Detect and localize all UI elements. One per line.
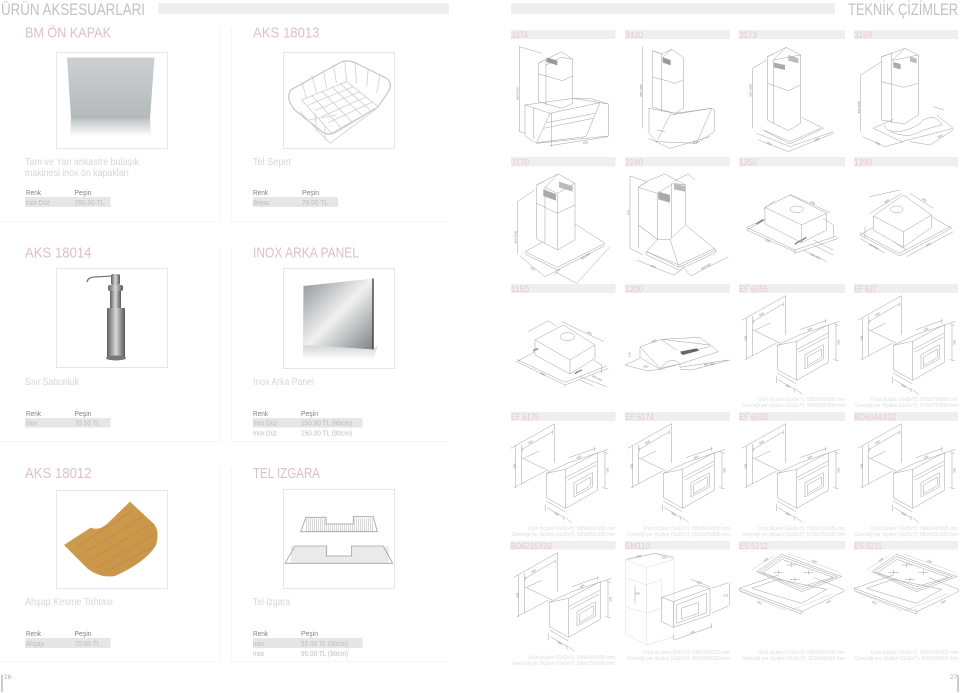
- drawing: hood 2240: 600: [650, 264, 657, 270]
- heading: BM ön kapak: BM ÖN KAPAK: [25, 24, 111, 42]
- panel: AKS 18013: [253, 24, 394, 207]
- price table: tel ızgara: Peşin: [301, 629, 318, 638]
- page number 26: 26: [4, 674, 12, 681]
- model label bars: ES 5212: [739, 541, 768, 552]
- model label bars: EM110: [625, 541, 650, 552]
- model label bars: EF 6175: [511, 412, 539, 423]
- panel: AKS 18012: [0, 465, 448, 662]
- drawing: hood 3159: 500: [875, 141, 881, 146]
- price table: tel ızgara: Inox: [253, 639, 264, 648]
- drawing: hood 3374: [515, 47, 608, 147]
- drawing: hood 3170: 850-1050: [514, 230, 518, 243]
- captions: product and niche dimensions: Ürün ölçüleri (GxDxY): 594x540x595 mm: [528, 654, 615, 661]
- price table: BM ön kapak: 260.00 TL: [74, 198, 104, 207]
- model label bars: 1390: [854, 158, 872, 168]
- drawing: oven EF 627: [858, 296, 956, 395]
- drawing: hood 1200: [625, 337, 730, 371]
- drawing: hood 1390: 600: [925, 242, 932, 248]
- price table: BM ön kapak: Peşin: [74, 188, 92, 197]
- photo: wire basket: [284, 52, 394, 148]
- model label bars: 3159: [854, 30, 872, 41]
- drawing: hood 3173: [749, 47, 833, 152]
- drawing: hood 1150: [517, 321, 608, 387]
- captions: product and niche dimensions: Ürün ölçüleri (GxDxY): 535x350x375 mm: [643, 649, 730, 656]
- photo: soap dispenser: [56, 268, 168, 368]
- description: sıvı sabunluk: Sıvı Sabunluk: [25, 377, 80, 388]
- drawing: hood 3420: 600: [693, 140, 699, 145]
- drawing: hood 1390: 300-450: [868, 242, 880, 251]
- drawing: hood 1200: 165: [628, 352, 632, 357]
- drawing: hob ES 5211: [854, 554, 958, 614]
- price table: AKS 18014: 70.00 TL: [74, 418, 100, 428]
- drawing: hood 1350: [747, 194, 838, 262]
- drawing: hood 1350: 600: [765, 238, 771, 244]
- drawing: oven EF 6175: [511, 424, 609, 523]
- drawing: microwave EM110: 560: [636, 554, 642, 559]
- photo: inox front panel: [56, 52, 168, 148]
- panel: tel ızgara: [253, 465, 394, 658]
- price table: AKS 18014: [25, 409, 110, 428]
- drawing: hood 3173: 850-1050: [749, 84, 753, 97]
- heading: AKS 18012: AKS 18012: [25, 465, 92, 482]
- drawing: hood 1150: 280: [586, 330, 593, 336]
- page number 27: 27: [950, 674, 958, 681]
- drawing: microwave EM110: [626, 553, 729, 645]
- model label bars: 3374: [511, 30, 528, 41]
- description: ahşap kesme tahtası: Ahşap Kesme Tahtası: [25, 597, 113, 608]
- drawing: hood 3420: 850-1050: [639, 84, 643, 97]
- drawing: hob ES 5212: [739, 554, 843, 614]
- price table: inox arka panel: 150.00 TL (90cm): [301, 428, 352, 438]
- price table: tel ızgara: Renk: [253, 629, 268, 638]
- drawing: hood 1200: 500: [643, 364, 649, 368]
- description: tel ızgara: Tel Izgara: [253, 597, 290, 608]
- model label bars: 1200: [625, 284, 643, 295]
- drawing: hood 3173: 600: [814, 137, 820, 143]
- price table: AKS 18014: Inox: [26, 418, 37, 428]
- price table: inox arka panel: Peşin: [301, 409, 318, 418]
- drawing: hood 2240: 600-900: [700, 262, 712, 271]
- price table: AKS 18013: Peşin: [302, 188, 319, 197]
- price table: inox arka panel: Inox Düz: [253, 428, 277, 438]
- drawing: hood 1390: 280: [921, 197, 928, 203]
- drawing: hood 1150: 300-450: [591, 374, 603, 382]
- title: ürün aksesuarları: ÜRÜN AKSESUARLARI: [1, 1, 145, 19]
- price table: BM ön kapak: Inox Düz: [26, 198, 50, 207]
- photo: inox back panel: [284, 268, 394, 368]
- captions: product and niche dimensions: Gireceği yer ölçüleri (GxDxY): 560x550x585 mm: [512, 532, 615, 538]
- price table: AKS 18012: 70.00 TL: [74, 639, 100, 648]
- captions: product and niche dimensions: Gireceği yer ölçüleri (GxDxY): 560x550x590 mm: [742, 403, 845, 409]
- model label bars: 2240: [625, 158, 643, 168]
- drawing: hood 1350: 598: [810, 200, 816, 206]
- heading: inox arka panel: INOX ARKA PANEL: [253, 244, 359, 262]
- drawing: oven BO6216X02: [514, 553, 612, 652]
- drawing: microwave EM110: 350: [697, 580, 702, 584]
- captions: product and niche dimensions: Gireceği yer ölçüleri (GxDxY): 570x570x590 mm: [742, 532, 845, 538]
- model label bars: EF 627: [854, 284, 877, 295]
- drawing: oven EF 6055: [742, 296, 840, 395]
- price table: inox arka panel: [253, 409, 362, 438]
- page number 27: [950, 674, 958, 692]
- model label bars: BO6216X02: [510, 541, 552, 552]
- drawing: microwave EM110: 595: [690, 629, 696, 635]
- photo: wire racks: [284, 490, 394, 588]
- page number 26: [2, 674, 12, 692]
- description: tel sepet: Tel Sepet: [253, 157, 291, 168]
- panel: AKS 18014: [0, 244, 448, 442]
- panel: BM ön kapak: [0, 24, 448, 222]
- captions: product and niche dimensions: Gireceği yer ölçüleri (GxDxY): 580x550x580 mm: [512, 661, 615, 667]
- drawing: hood 3374: 600: [583, 140, 589, 145]
- drawing: hood 2240: [626, 174, 728, 276]
- price table: tel ızgara: 95.00 TL (90cm): [301, 649, 348, 658]
- model label bars: 3173: [739, 30, 757, 41]
- drawing: hood 3159: 850-1050: [857, 100, 861, 113]
- price table: AKS 18012: Ahşap: [26, 639, 44, 648]
- description: BM ön kapak: Tam ve Yan ankastre bulaşık: [25, 157, 140, 168]
- price table: inox arka panel: Inox Düz: [253, 418, 277, 428]
- price table: BM ön kapak: Renk: [26, 188, 41, 197]
- captions: product and niche dimensions: Ürün ölçüleri (GxDxY): 595x560x595 mm: [528, 525, 615, 532]
- title: teknik çizimler: [511, 0, 958, 19]
- model label bars: 1150: [511, 284, 529, 295]
- price table: tel ızgara: [253, 629, 362, 658]
- captions: product and niche dimensions: Ürün ölçüleri (GxDxY): 590x570x595 mm: [758, 525, 845, 532]
- model label bars: BO6044X02: [854, 412, 896, 423]
- description: BM ön kapak: makinesi inox ön kapakları: [25, 168, 129, 179]
- model label bars: 3170: [511, 158, 529, 168]
- photo: wooden cutting board: [56, 490, 168, 588]
- price table: tel ızgara: 55.00 TL (60cm): [301, 639, 348, 648]
- drawing: hood 1390: 598: [883, 198, 890, 204]
- price table: AKS 18012: Peşin: [74, 629, 92, 638]
- drawing: hood 3173: 500: [766, 141, 773, 146]
- captions: product and niche dimensions: Gireceği yer ölçüleri (GxDxY): 553x490x50 mm: [742, 656, 845, 662]
- drawing: microwave EM110: 375: [723, 594, 729, 598]
- drawing: oven BO6044X02: [858, 424, 956, 523]
- model label bars: [510, 30, 958, 552]
- price table: AKS 18012: [25, 629, 110, 648]
- price table: AKS 18013: Beyaz: [253, 198, 270, 207]
- drawing: hood 3170: 600-900: [580, 251, 592, 261]
- drawing: hood 1350: 300-450: [810, 252, 821, 261]
- drawing: hood 1390: [860, 190, 953, 257]
- drawing: hood 3159: 600: [937, 133, 944, 139]
- model label bars: EF 6033: [739, 412, 768, 423]
- price table: AKS 18013: Renk: [253, 188, 268, 197]
- drawing: hood 3170: [514, 174, 610, 283]
- model label bars: 3420: [625, 30, 643, 41]
- drawing: hood 3420: [639, 47, 714, 148]
- captions: product and niche dimensions: Gireceği yer ölçüleri (GxDxY): 560x560x585 mm: [627, 532, 730, 538]
- price table: tel ızgara: Inox: [253, 649, 264, 658]
- price table: AKS 18013: 70.00 TL: [302, 198, 328, 207]
- price table: BM ön kapak: [25, 188, 110, 207]
- price table: AKS 18014: Renk: [26, 409, 41, 418]
- price table: inox arka panel: Renk: [253, 409, 268, 418]
- drawing: hood 1150: 600: [540, 371, 546, 377]
- drawing: hood 1200: 600-900: [704, 361, 715, 367]
- price table: inox arka panel: 150.00 TL (60cm): [301, 418, 352, 428]
- panel: inox arka panel: [253, 244, 394, 438]
- captions: product and niche dimensions: Ürün ölçüleri (GxDxY): 590x520x100 mm: [758, 649, 845, 656]
- description: inox arka panel: Inox Arka Panel: [253, 377, 314, 388]
- model label bars: EF 6055: [739, 284, 768, 295]
- drawing: hood 3374: 850-1050: [515, 87, 519, 100]
- captions: product and niche dimensions: Ürün ölçüleri (GxDxY): 595x560x595 mm: [643, 525, 730, 532]
- drawing: hood 1200: 500: [651, 338, 657, 344]
- model label bars: EF 6174: [625, 412, 654, 423]
- drawing: microwave EM110: 350: [662, 555, 667, 559]
- drawing: hood 2240: 670: [626, 210, 630, 215]
- model label bars: ES 5211: [854, 541, 882, 552]
- price table: AKS 18012: Renk: [26, 629, 41, 638]
- captions: product and niche dimensions: Ürün ölçüleri (GxDxY): 595x560x595 mm: [758, 396, 845, 403]
- heading: AKS 18013: AKS 18013: [253, 24, 320, 42]
- captions: product and niche dimensions: [512, 396, 958, 667]
- drawing: hood 3170: 500: [529, 266, 536, 272]
- captions: product and niche dimensions: Gireceği yer ölçüleri (GxDxY): 560x350x350 mm: [627, 656, 730, 662]
- price table: AKS 18013: [253, 188, 338, 207]
- title: ürün aksesuarları: [1, 1, 449, 19]
- heading: AKS 18014: AKS 18014: [25, 244, 92, 262]
- drawing: oven EF 6033: [742, 424, 840, 523]
- heading: tel ızgara: TEL IZGARA: [253, 465, 320, 482]
- drawing: hood 3159: [857, 48, 953, 147]
- drawing: oven EF 6174: [628, 424, 726, 523]
- price table: AKS 18014: Peşin: [74, 409, 92, 418]
- model label bars: 1350: [739, 158, 757, 168]
- drawing: microwave EM110: 350: [635, 591, 640, 595]
